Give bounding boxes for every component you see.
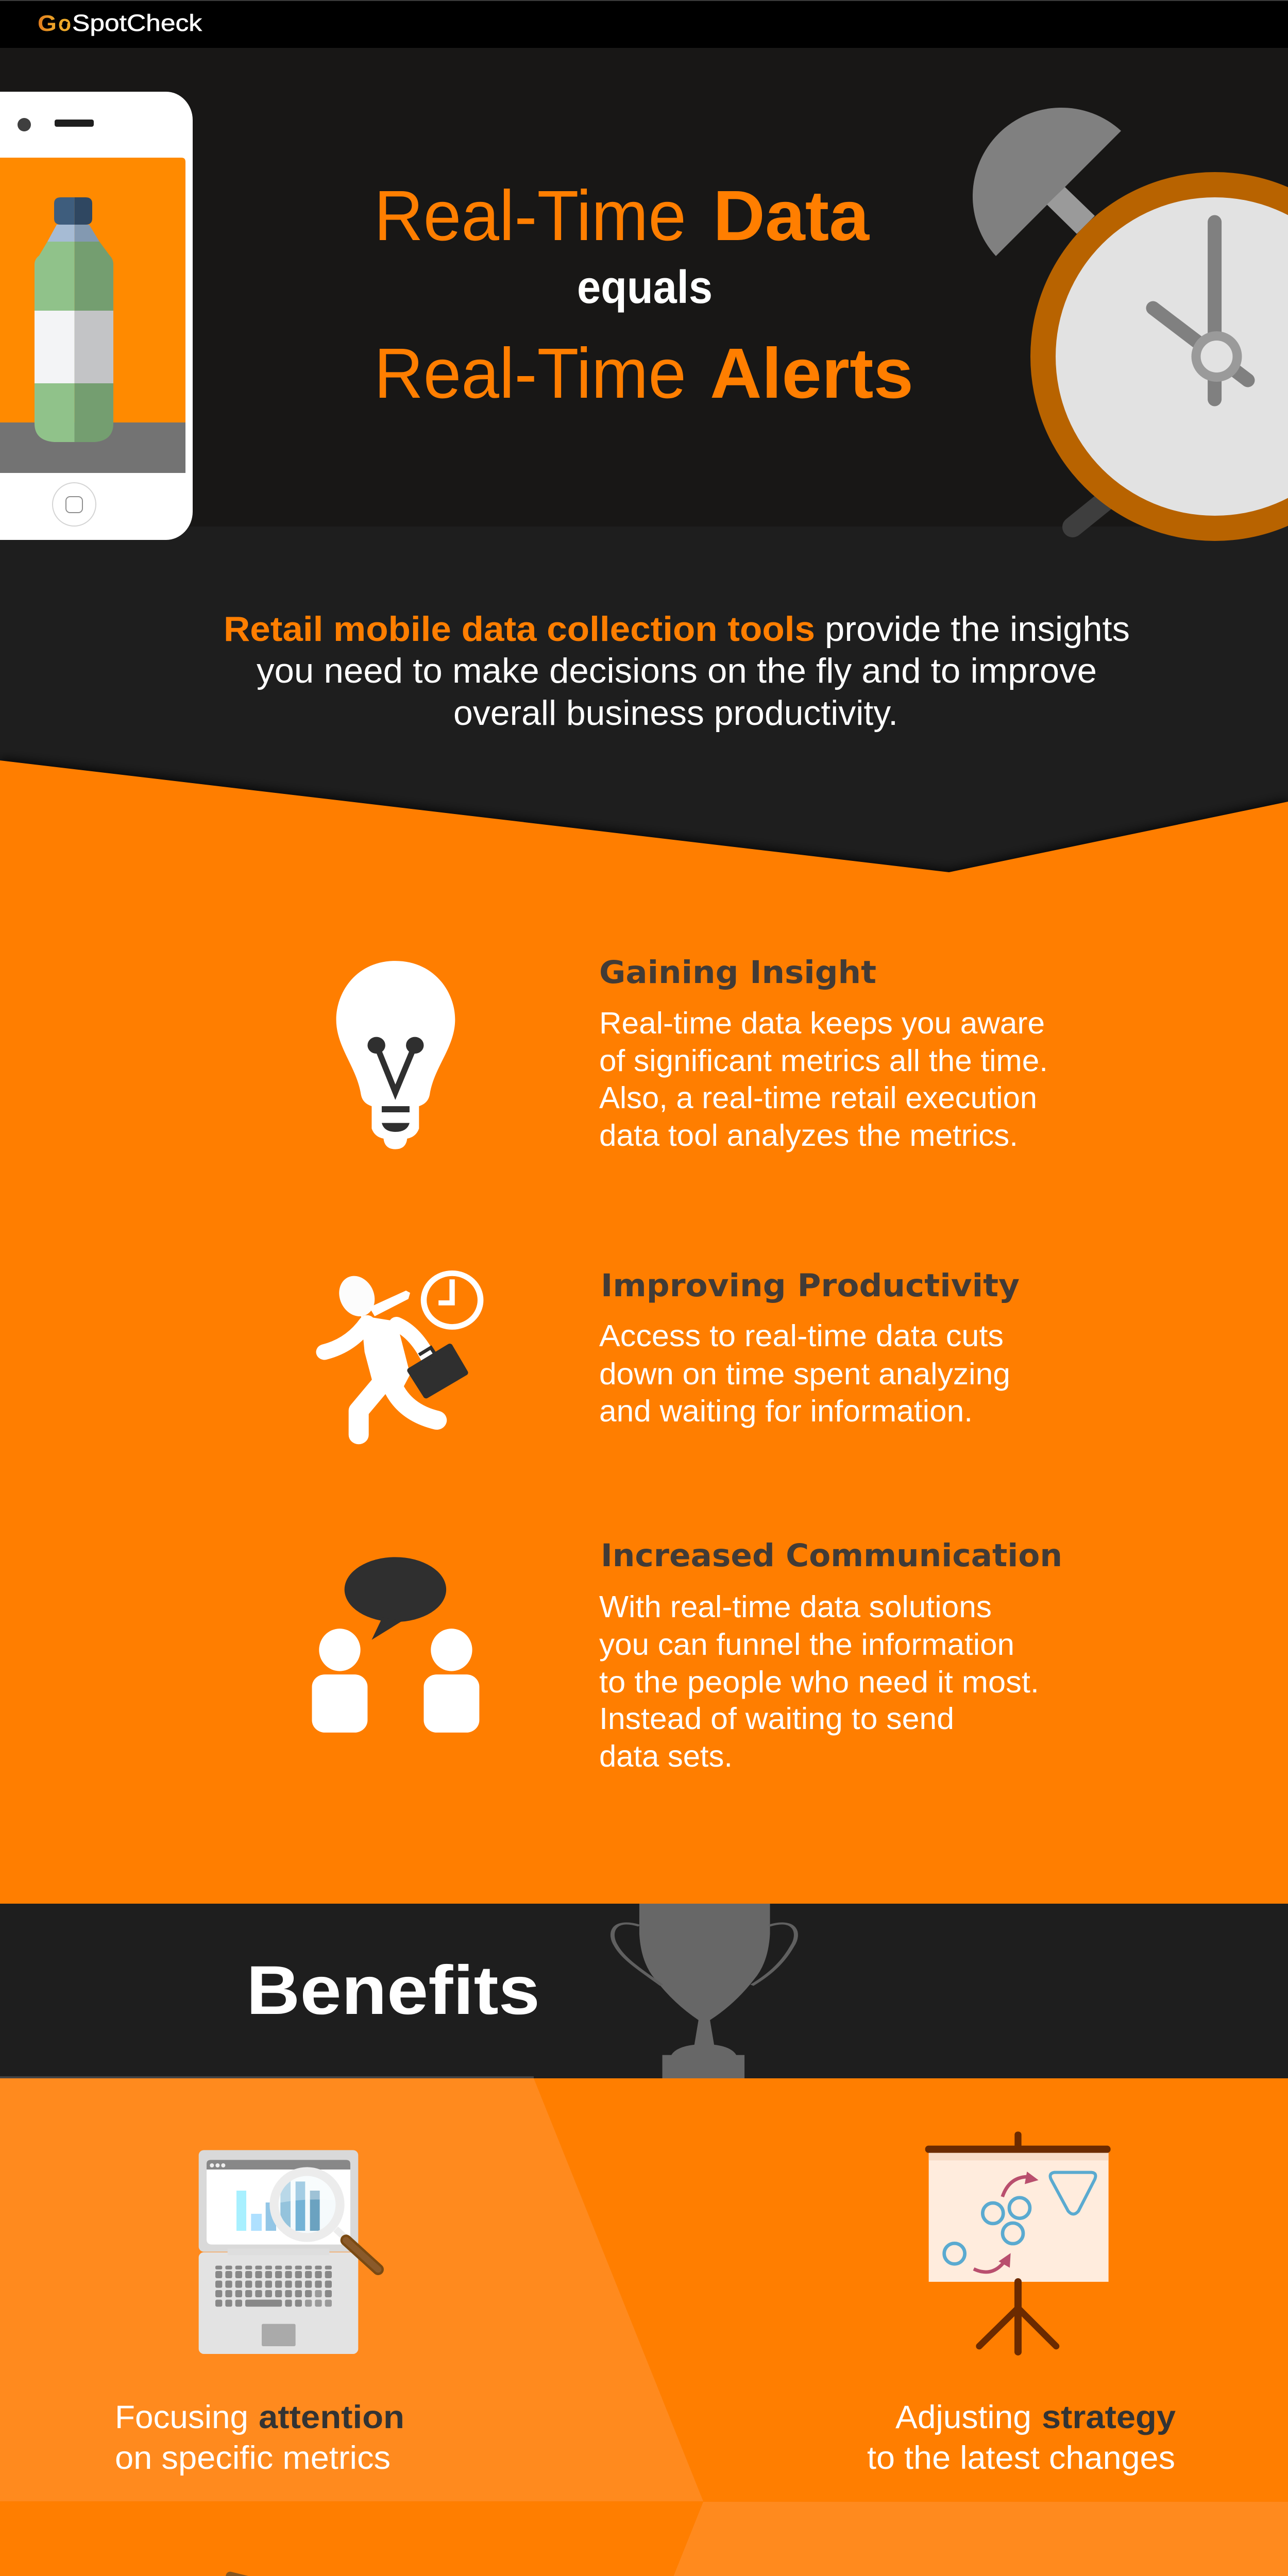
header logo xyxy=(38,10,202,36)
text block: Gaining Insight: Real-time data keeps you aware xyxy=(599,1006,1045,1040)
panel: identifying issues xyxy=(114,2576,406,2577)
text block: Gaining Insight: of significant metrics all the time. xyxy=(599,1044,1048,1078)
heading: Benefits: Benefits xyxy=(246,1952,540,2029)
text block: Increased Communication: to the people who need it most. xyxy=(599,1665,1039,1699)
panel: benefits grid background xyxy=(0,2078,1288,2576)
panel: hero background xyxy=(0,48,1288,527)
label: adjusting strategy: to the latest changes xyxy=(867,2440,1175,2476)
text block: Increased Communication: data sets. xyxy=(599,1739,733,1773)
panel: adjusting strategy xyxy=(867,2131,1176,2476)
intro text: you need to make decisions on the fly and to improve xyxy=(257,651,1097,690)
panel: focusing attention xyxy=(0,2076,703,2501)
panel: benefits band xyxy=(0,1904,1288,2078)
text block: Improving Productivity: Access to real-time data cuts xyxy=(599,1319,1004,1353)
text block: Gaining Insight: data tool analyzes the metrics. xyxy=(599,1118,1018,1153)
title: equals xyxy=(577,262,713,313)
intro text: overall business productivity. xyxy=(453,693,898,733)
text block: Increased Communication: you can funnel the information xyxy=(599,1628,1014,1662)
panel: top logo bar xyxy=(0,0,1288,48)
title xyxy=(374,176,913,413)
label: focusing attention xyxy=(115,2399,404,2476)
icon: alarm clock xyxy=(973,108,1288,541)
icon: presentation board xyxy=(925,2131,1111,2352)
icon: trophy xyxy=(613,1897,796,2078)
panel: staying competitive xyxy=(674,2502,1288,2576)
label: focusing attention: attention xyxy=(259,2399,404,2435)
text block: Gaining Insight: Gaining Insight xyxy=(599,954,876,991)
icon: laptop with magnifier xyxy=(199,2150,378,2354)
label: adjusting strategy: strategy xyxy=(1042,2399,1176,2435)
text block: Increased Communication xyxy=(599,1537,1062,1773)
icon: running man with clock xyxy=(325,1271,481,1435)
text block: Improving Productivity: Improving Productivity xyxy=(601,1267,1020,1304)
header logo: o xyxy=(58,11,71,36)
panel: intro background xyxy=(0,527,1288,939)
panel: orange features section xyxy=(0,760,1288,1904)
intro text xyxy=(224,609,1130,733)
text block: Increased Communication: With real-time data solutions xyxy=(599,1590,992,1624)
text block: Improving Productivity xyxy=(599,1267,1020,1428)
panel: orange edge shadow xyxy=(0,758,1288,927)
label: focusing attention: Focusing xyxy=(115,2399,248,2435)
label: focusing attention: on specific metrics xyxy=(115,2440,391,2476)
header logo: SpotCheck xyxy=(72,10,202,36)
icon: clipboard checklist xyxy=(184,2576,357,2577)
label: adjusting strategy: Adjusting xyxy=(895,2399,1031,2435)
icon: phone with bottle xyxy=(0,92,193,540)
text block: Improving Productivity: down on time spent analyzing xyxy=(599,1357,1010,1391)
text block: Increased Communication: Instead of waiting to send xyxy=(599,1702,954,1736)
header logo: G xyxy=(38,11,57,36)
text block: Increased Communication: Increased Communication xyxy=(601,1537,1062,1574)
title: Real-Time xyxy=(374,334,686,413)
label: adjusting strategy xyxy=(867,2399,1176,2476)
text block: Improving Productivity: and waiting for information. xyxy=(599,1394,973,1428)
text block: Gaining Insight: Also, a real-time retail execution xyxy=(599,1081,1037,1115)
intro text: Retail mobile data collection tools xyxy=(224,609,815,649)
intro text: provide the insights xyxy=(825,609,1130,649)
icon: light bulb xyxy=(336,961,455,1149)
title: Data xyxy=(713,176,870,256)
text block: Gaining Insight xyxy=(599,954,1048,1153)
icon: two people talking xyxy=(312,1557,479,1733)
title: Alerts xyxy=(710,334,913,413)
title: Real-Time xyxy=(374,176,686,256)
